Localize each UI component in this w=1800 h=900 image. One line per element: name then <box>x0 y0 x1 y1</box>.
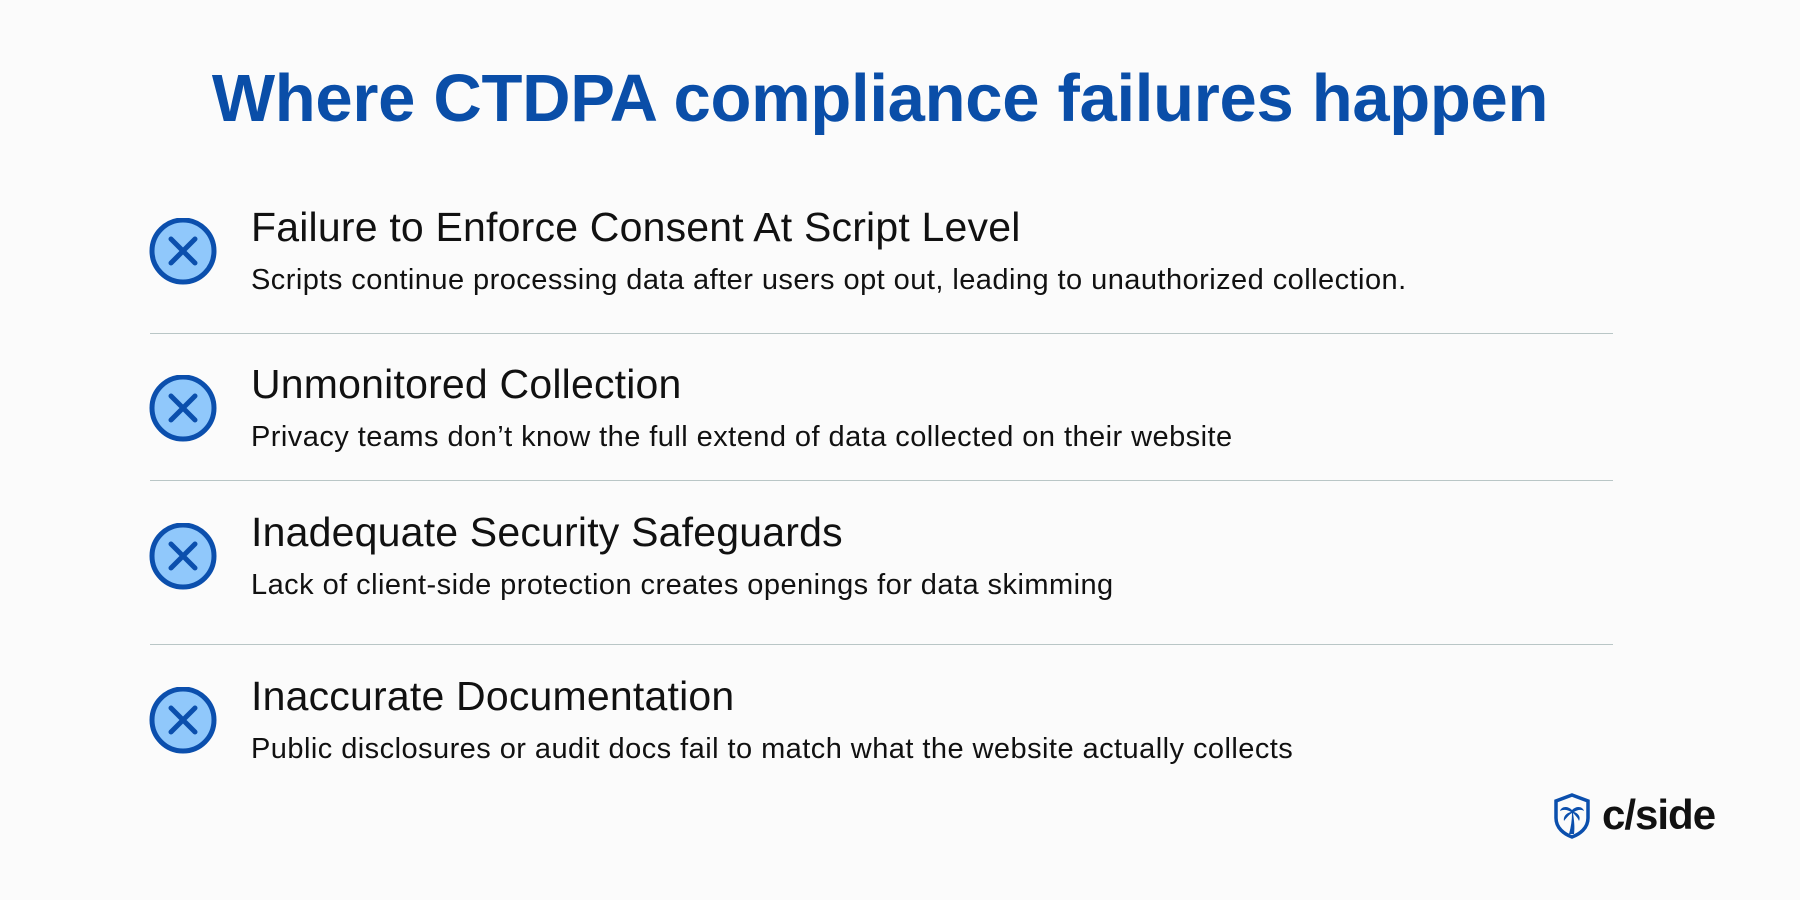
description: Lack of client-side protection creates openings for data skimming <box>251 569 1114 601</box>
description: Privacy teams don’t know the full extend of data collected on their website <box>251 421 1233 453</box>
item: unmonitored <box>150 361 1233 453</box>
icon: shield palm <box>1554 793 1590 839</box>
item: security <box>150 509 1114 601</box>
description: Public disclosures or audit docs fail to match what the website actually collects <box>251 733 1293 765</box>
icon: x circle <box>150 218 216 284</box>
description: Scripts continue processing data after users opt out, leading to unauthorized collection. <box>251 264 1407 296</box>
icon: x circle <box>150 375 216 442</box>
heading: Inadequate Security Safeguards <box>251 509 843 555</box>
item: consent <box>150 204 1407 296</box>
heading: Failure to Enforce Consent At Script Level <box>251 204 1021 250</box>
icon: x circle <box>150 523 216 590</box>
item: documentation <box>150 673 1293 765</box>
logo <box>1554 791 1715 839</box>
heading: Inaccurate Documentation <box>251 673 734 719</box>
heading: Unmonitored Collection <box>251 361 682 407</box>
icon: x circle <box>150 687 216 754</box>
title: Where CTDPA compliance failures happen <box>212 61 1548 136</box>
wordmark: c/side <box>1602 791 1715 838</box>
